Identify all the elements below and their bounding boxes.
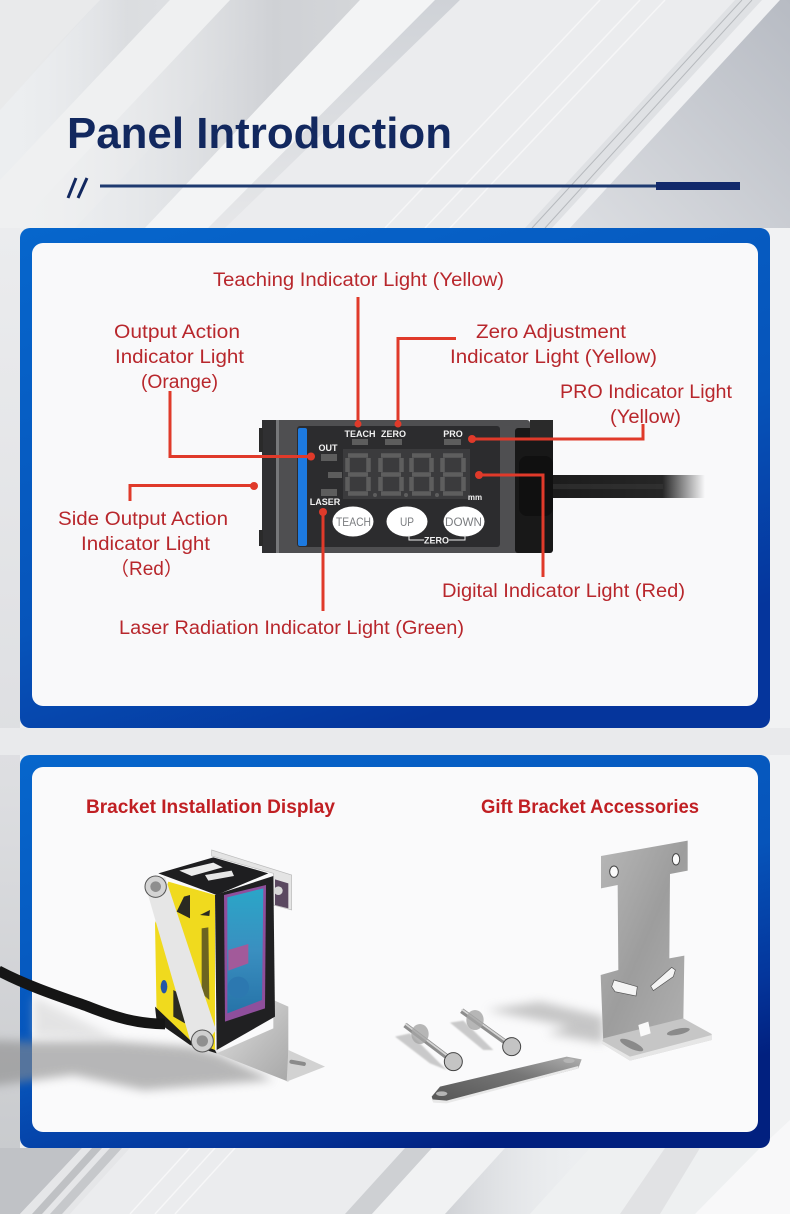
callout: PRO indicator: PRO Indicator Light [560,382,733,403]
callout: zero adjustment indicator: Zero Adjustment [476,322,627,343]
callout: laser radiation indicator: Laser Radiation Indicator Light (Green) [119,618,464,639]
callout: teaching indicator [213,270,504,428]
callout: teaching indicator: Teaching Indicator Light (Yellow) [213,270,504,291]
strap plate [432,1057,582,1103]
callout: output action indicator: (Orange) [141,372,218,393]
callout: output action indicator: Output Action [114,322,240,343]
title underline with double slash [68,178,740,198]
callout: side output action indicator: Side Output Action [58,509,228,530]
callout: zero adjustment indicator: Indicator Light (Yellow) [450,347,657,368]
device body: PRO [443,429,463,439]
device body: OUT [318,443,338,453]
heading: bracket installation: Bracket Installation Display [86,797,335,818]
callout: side output action indicator: （Red） [110,558,183,580]
illustration: sensor mounted on bracket [0,850,325,1090]
device body [259,420,705,553]
device body: TEACH [344,429,376,439]
callout: zero adjustment indicator [394,322,657,428]
illustration: gift bracket accessories [395,841,712,1103]
callout: output action indicator [114,322,315,460]
device body: UP [400,515,414,529]
callout: side output action indicator [58,482,258,580]
device body: TEACH [336,515,371,529]
panel: bracket display [0,755,770,1148]
upright bracket [601,841,712,1061]
bolts [405,1009,521,1071]
callout: output action indicator: Indicator Light [115,347,245,368]
shadows [395,1002,603,1070]
device body: ZERO [381,429,406,439]
device body: ZERO [424,536,449,546]
device body: mm [468,493,482,502]
callout: digital indicator [442,471,685,602]
panel: control panel diagram [20,228,770,728]
callout: laser radiation indicator [119,508,464,639]
callout: side output action indicator: Indicator Light [81,534,211,555]
callout: PRO indicator [468,382,733,443]
device body: DOWN [445,515,482,529]
callout: PRO indicator: (Yellow) [610,407,681,428]
device body: LASER [310,497,341,507]
callout: digital indicator: Digital Indicator Light (Red) [442,581,685,602]
heading: gift accessories: Gift Bracket Accessories [481,797,699,818]
title: Panel Introduction [67,109,452,158]
